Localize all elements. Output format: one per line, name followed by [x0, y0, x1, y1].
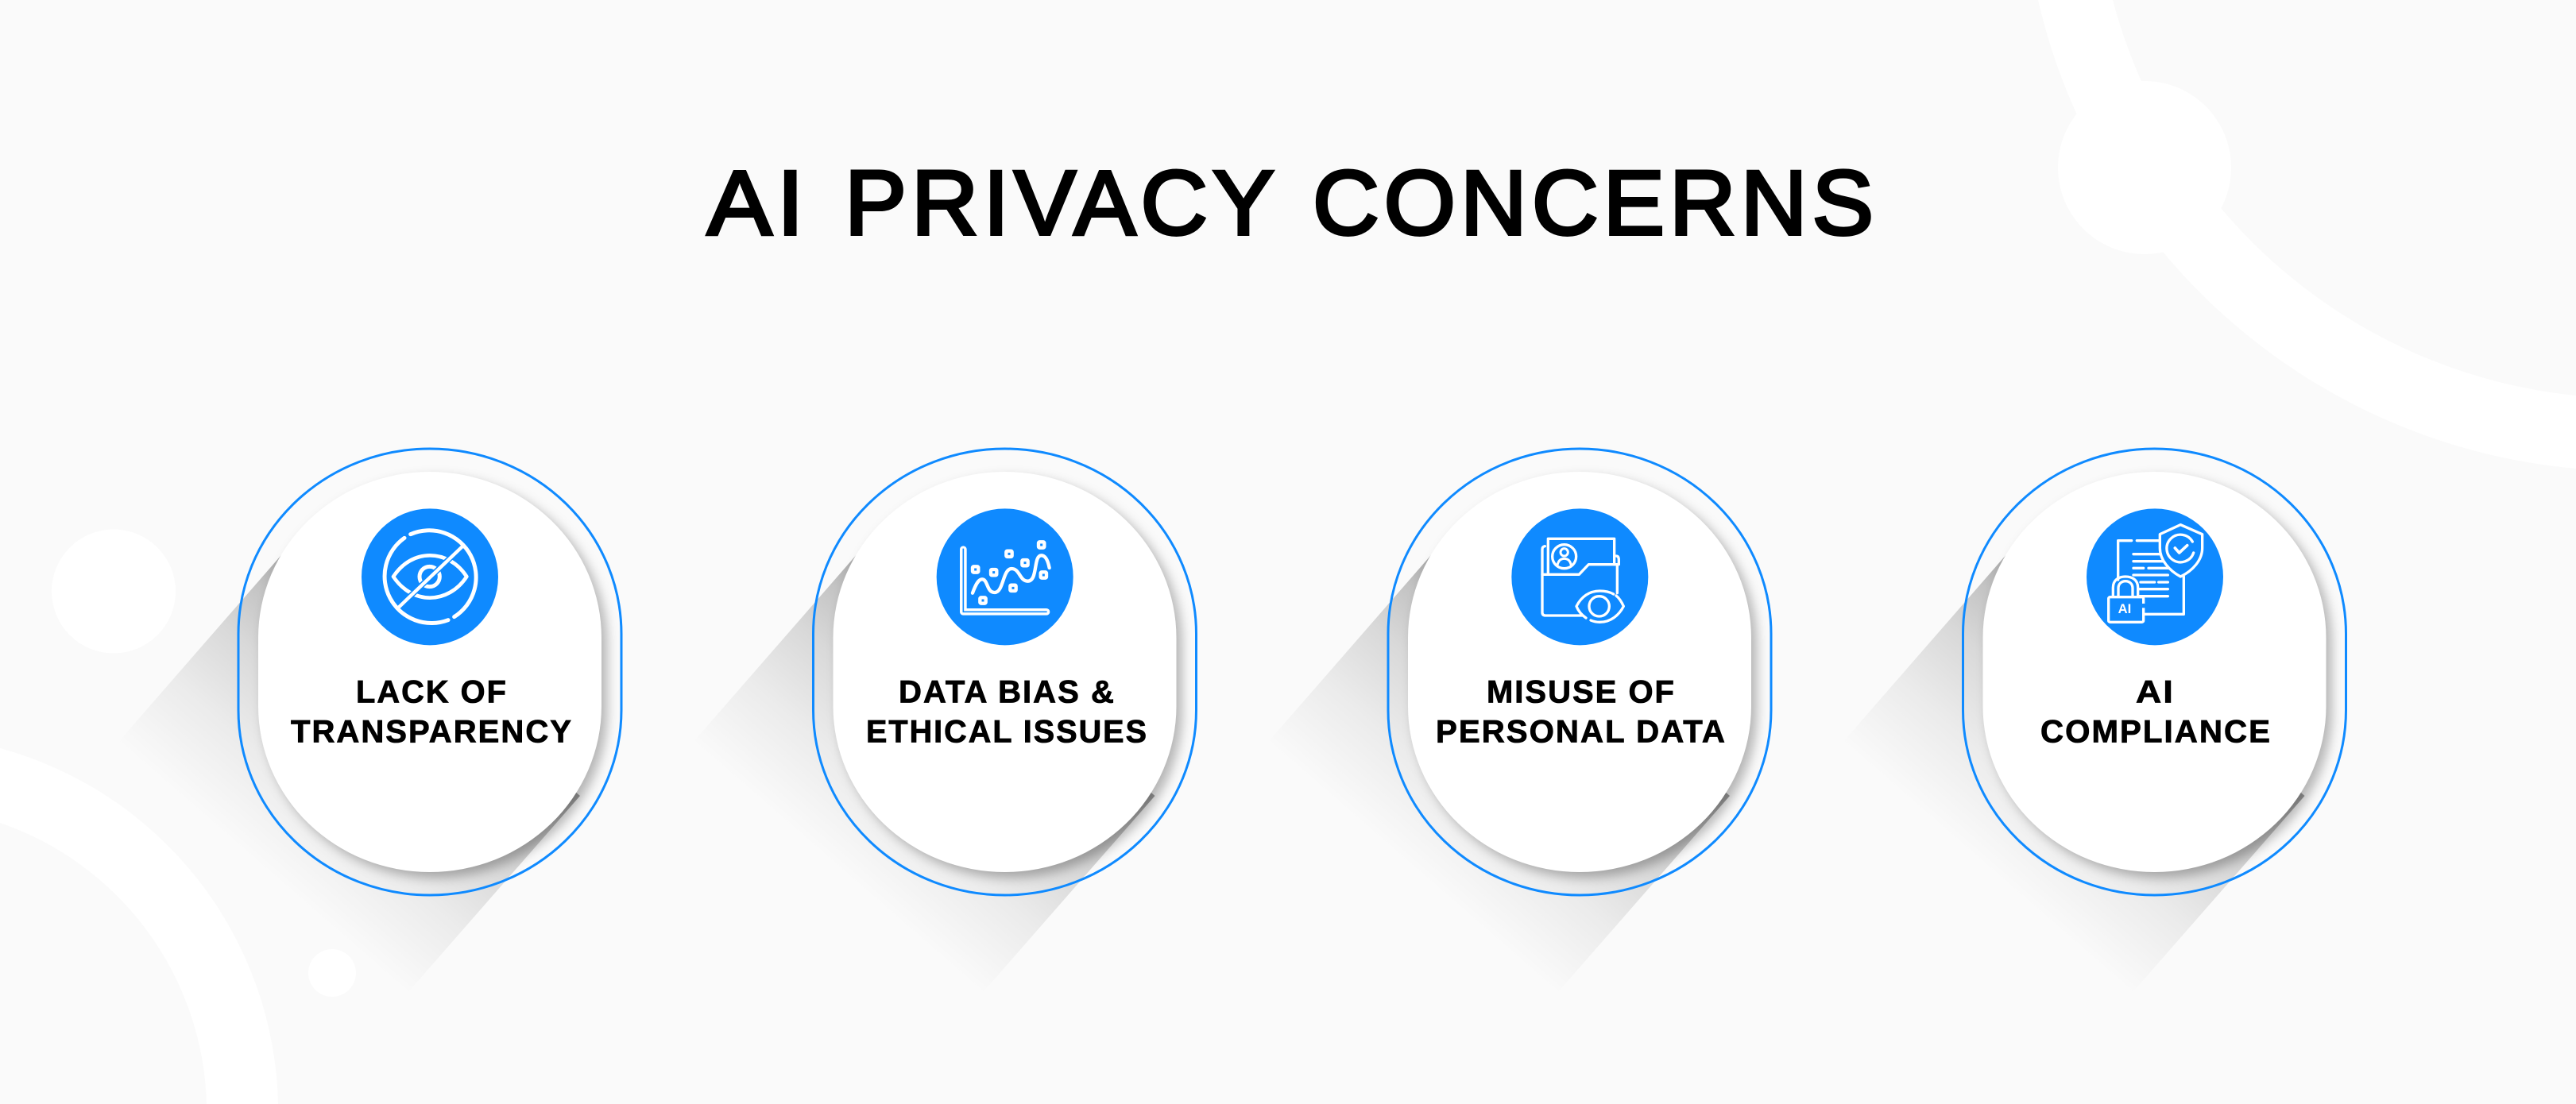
label: MISUSE OF	[1487, 675, 1676, 710]
long shadow	[109, 550, 580, 993]
label: AI	[2136, 675, 2175, 710]
label: COMPLIANCE	[2040, 715, 2272, 750]
title: CONCERNS	[1313, 152, 1878, 254]
outline ring	[814, 449, 1197, 895]
title: PRIVACY	[845, 152, 1278, 254]
icon: folder with eye	[1511, 508, 1648, 645]
outline ring	[238, 449, 621, 895]
icon: document, shield and AI lock: AI	[2118, 601, 2131, 616]
decorative background: top right arc and circle	[2038, 0, 2576, 469]
outline ring	[1963, 449, 2346, 895]
outline ring	[1388, 449, 1771, 895]
icon: document, shield and AI lock	[2087, 508, 2223, 645]
white panel	[258, 472, 601, 872]
white panel	[833, 472, 1176, 872]
label: ETHICAL ISSUES	[866, 715, 1148, 750]
long shadow	[683, 550, 1155, 993]
white panel	[1408, 472, 1751, 872]
label: PERSONAL DATA	[1436, 715, 1727, 750]
title: AI	[707, 152, 809, 254]
decorative background: bottom left arc and circles	[0, 529, 356, 1104]
label: LACK OF	[356, 675, 508, 710]
card: misuse of personal data	[1259, 449, 1771, 993]
long shadow	[1259, 550, 1730, 993]
white panel	[1983, 472, 2327, 872]
icon: scatter chart	[937, 508, 1073, 645]
label: DATA BIAS &	[899, 675, 1116, 710]
long shadow	[1834, 550, 2304, 993]
card: lack of transparency	[109, 449, 621, 993]
label: TRANSPARENCY	[291, 715, 573, 750]
card: AI compliance	[1834, 449, 2346, 993]
icon: crossed-out eye	[362, 508, 498, 645]
card: data bias and ethical issues	[683, 449, 1197, 993]
